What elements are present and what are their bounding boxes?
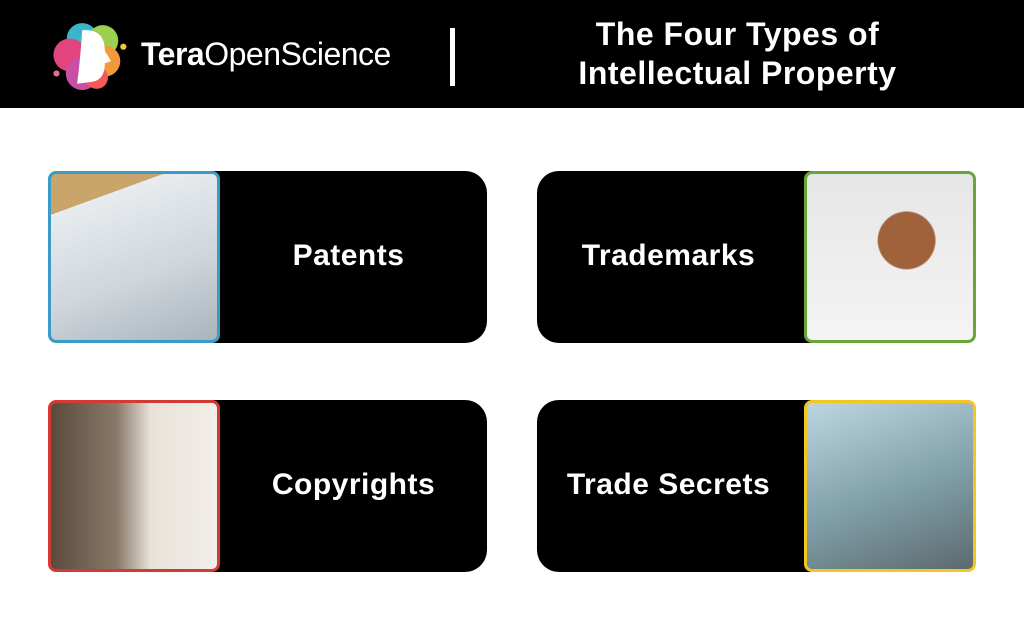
image: stamp hand — [48, 400, 220, 572]
title: Intellectual Property — [578, 55, 897, 91]
panel: trade secrets — [537, 400, 976, 572]
divider — [450, 28, 455, 86]
title: The Four Types of — [596, 16, 879, 52]
panel: patents — [48, 171, 487, 343]
label: Copyrights — [272, 468, 435, 501]
label: Patents — [293, 239, 404, 272]
title — [578, 16, 897, 91]
image: patent application — [48, 171, 220, 343]
header — [0, 0, 1024, 108]
icon: logo — [53, 23, 126, 90]
label: Trademarks — [582, 239, 755, 272]
panel: trademarks — [537, 171, 976, 343]
image: coins chart — [804, 400, 976, 572]
logo text: TeraOpenScience — [141, 36, 391, 72]
panel: copyrights — [48, 400, 487, 572]
image: stamp — [804, 171, 976, 343]
label: Trade Secrets — [567, 468, 770, 501]
